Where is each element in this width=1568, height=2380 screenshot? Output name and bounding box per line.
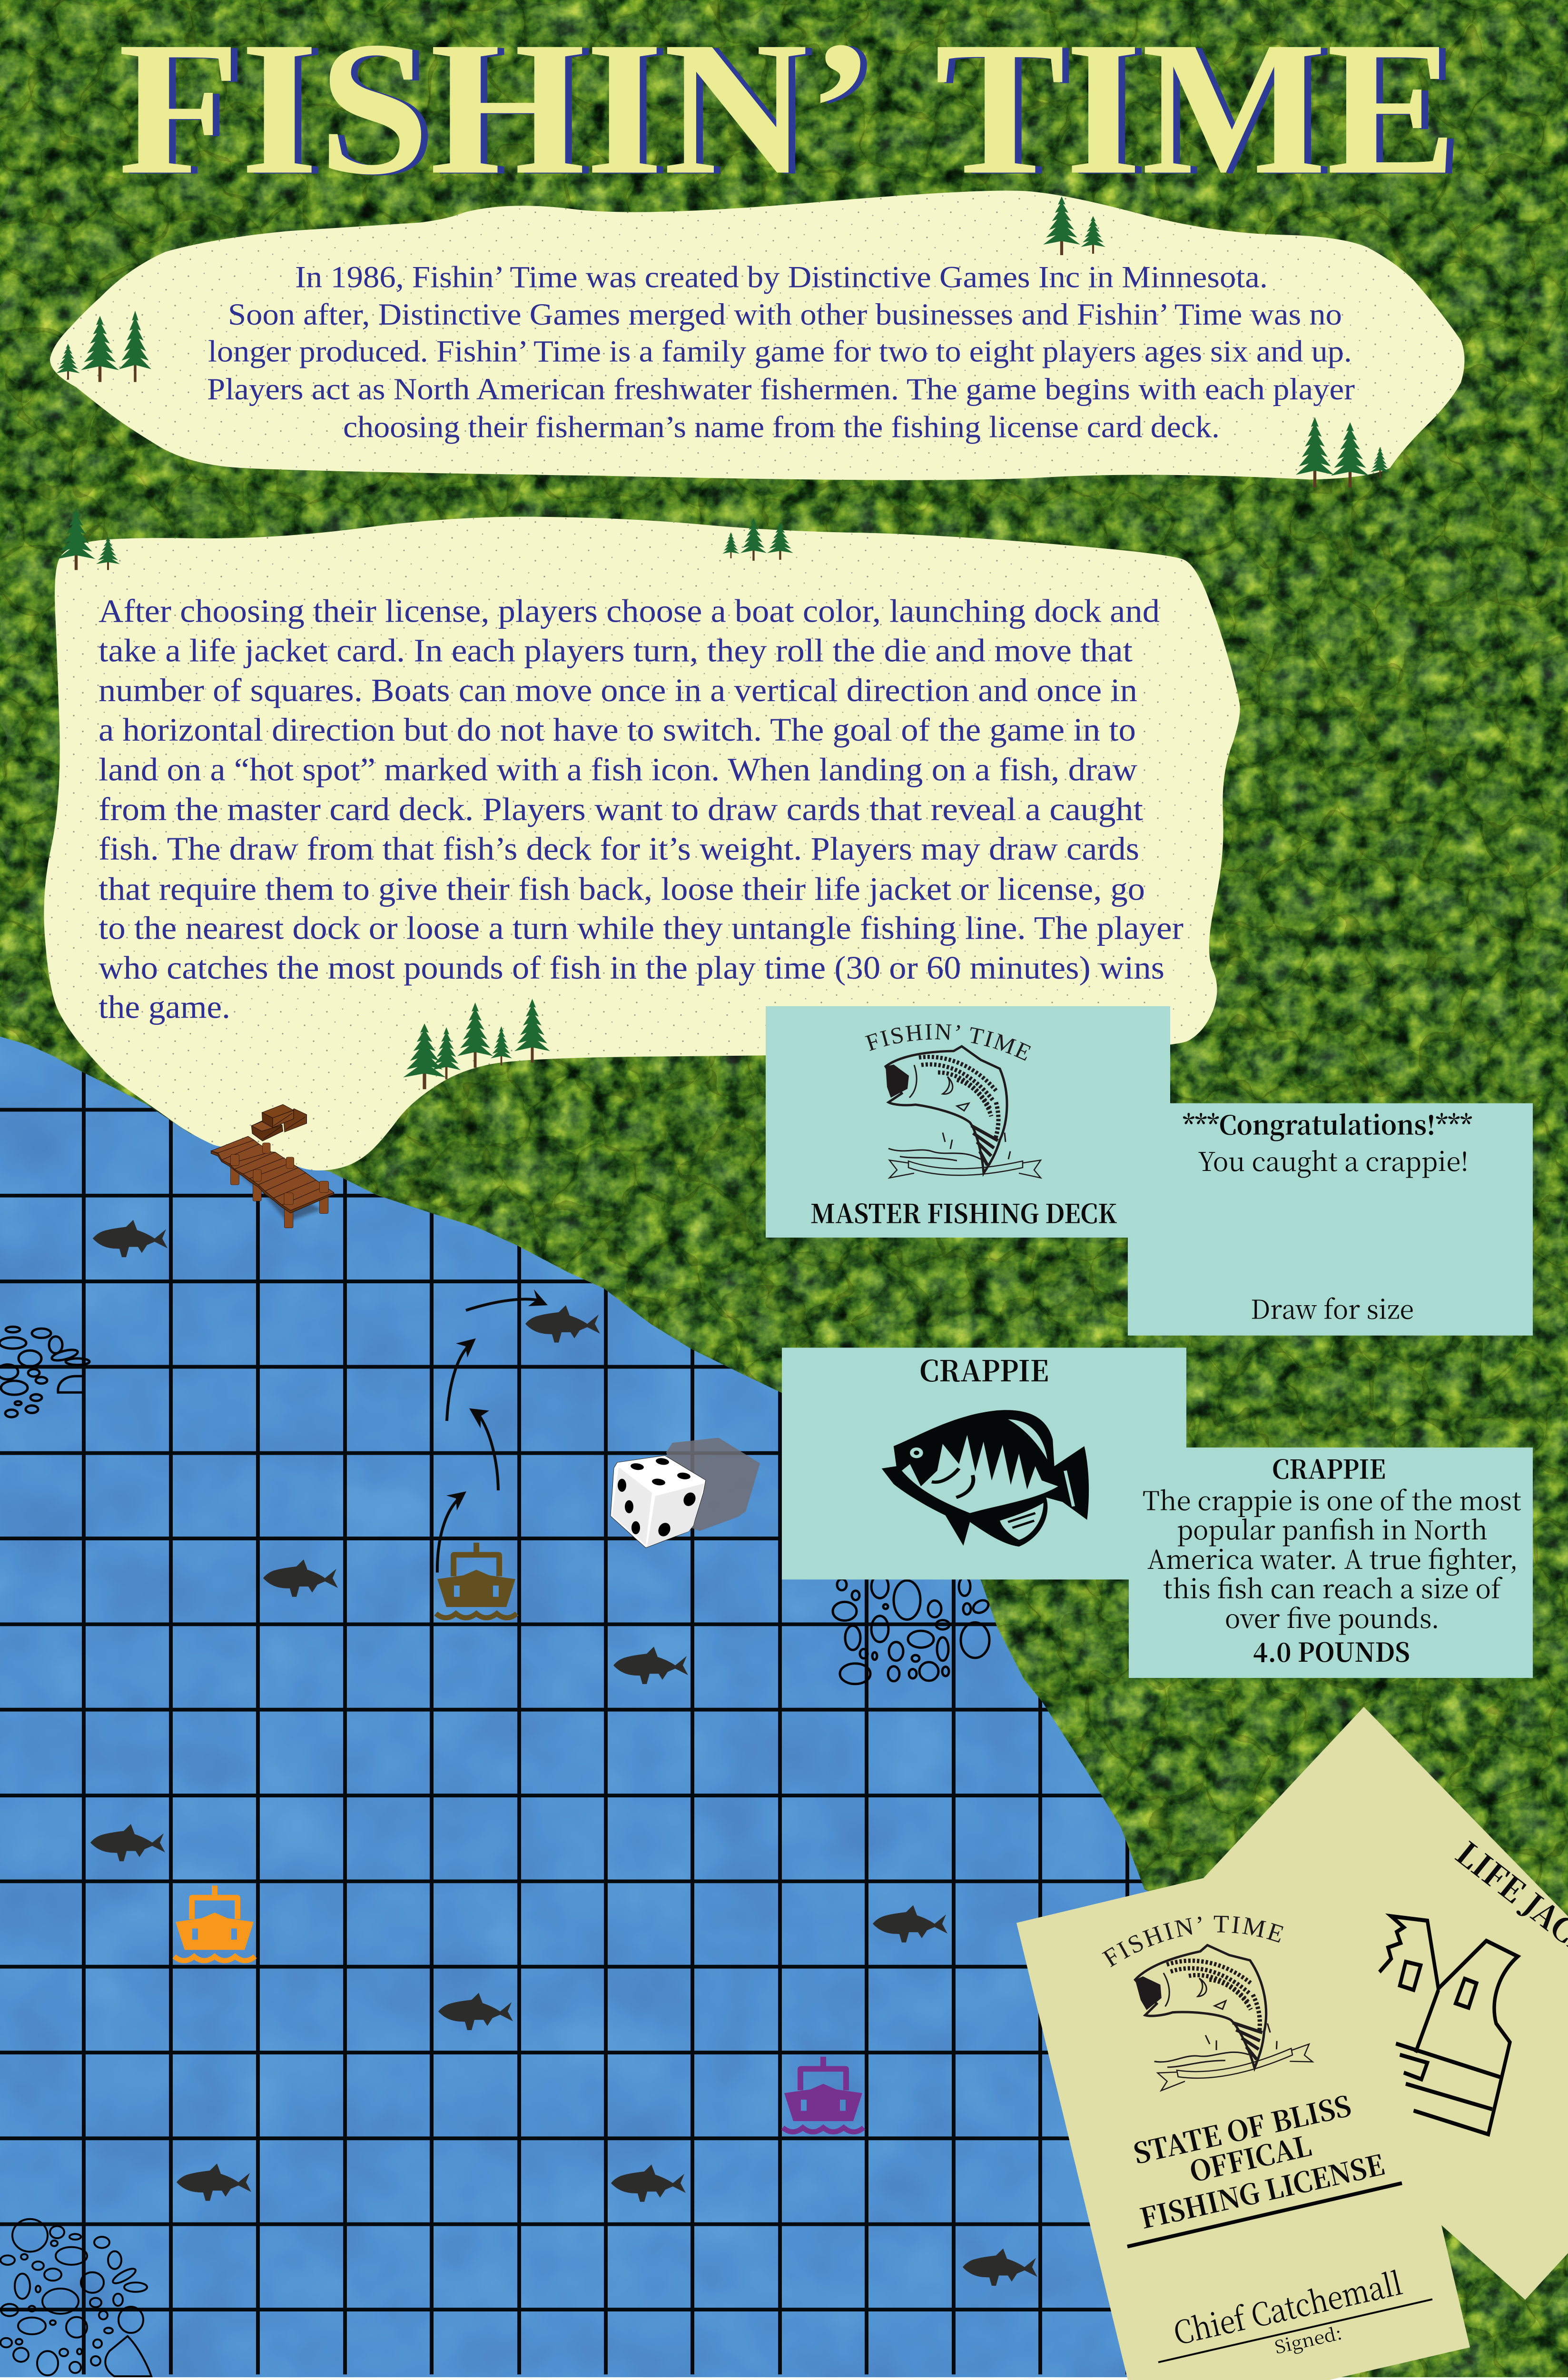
card: congratulations: You caught a crappie! xyxy=(1198,1140,1469,1179)
card: fishing license: Chief Catchemall xyxy=(1169,2259,1406,2354)
boat: orange xyxy=(174,1885,255,1961)
card: crappie description: CRAPPIE xyxy=(1272,1448,1386,1486)
logo: fishin' time arc text: FISHIN’ TIME xyxy=(862,1019,1036,1067)
card: crappie description: 4.0 POUNDS xyxy=(1253,1631,1410,1669)
rocks: left cluster xyxy=(0,1327,89,1417)
card: life jacket xyxy=(1203,1707,1568,2300)
rules text: take a life jacket card. In each players turn, they roll the die and move that xyxy=(99,632,1133,668)
card: congratulations: ***Congratulations!*** xyxy=(1183,1104,1472,1142)
sand shore: rules panel xyxy=(44,517,1240,1170)
logo: leaping bass xyxy=(1131,1930,1312,2092)
card: crappie description: over five pounds. xyxy=(1225,1598,1440,1636)
white strip at bottom edge xyxy=(0,2377,1568,2380)
card: crappie description: this fish can reach a size of xyxy=(1163,1568,1503,1606)
logo: leaping bass xyxy=(886,1046,1041,1178)
rocks: shore cluster xyxy=(833,1575,991,1684)
intro text: Players act as North American freshwater fishermen. The game begins with each player xyxy=(207,372,1355,407)
arrows: boat movement xyxy=(437,1289,548,1573)
dock legs xyxy=(231,1165,328,1228)
pine trees xyxy=(56,197,1390,1089)
rules text xyxy=(99,593,1183,1025)
intro text: In 1986, Fishin’ Time was created by Distinctive Games Inc in Minnesota. xyxy=(295,260,1268,295)
boat: brown xyxy=(436,1543,517,1618)
rules text: to the nearest dock or loose a turn while they untangle fishing line. The player xyxy=(99,910,1183,946)
logo: fishin' time arc text: FISHIN’ TIME xyxy=(1098,1910,1289,1973)
sand island: intro panel xyxy=(50,191,1465,480)
card: crappie picture xyxy=(782,1348,1186,1579)
card: crappie description: The crappie is one of the most xyxy=(1143,1480,1521,1517)
card: crappie picture: CRAPPIE xyxy=(919,1348,1049,1390)
license heading: OFFICAL xyxy=(1185,2124,1315,2190)
die with shadow xyxy=(611,1438,760,1548)
card: master fishing deck: MASTER FISHING DECK xyxy=(810,1193,1117,1230)
intro text xyxy=(207,260,1355,444)
title: FISHIN’ xyxy=(125,3,881,216)
rules text: fish. The draw from that fish’s deck for it’s weight. Players may draw cards xyxy=(99,831,1139,867)
icon: life jacket xyxy=(1380,1916,1518,2134)
boat: purple xyxy=(783,2057,864,2132)
icon: crappie fish xyxy=(882,1410,1089,1547)
card: fishing license: Signed: xyxy=(1272,2319,1344,2359)
card: fishing license xyxy=(1016,1878,1470,2380)
license heading: STATE OF BLISS xyxy=(1129,2084,1355,2172)
rules text: After choosing their license, players choose a boat color, launching dock and xyxy=(99,593,1160,629)
card: master fishing deck xyxy=(766,1006,1170,1238)
rules text: that require them to give their fish back, loose their life jacket or license, go xyxy=(99,871,1145,907)
dock deck xyxy=(211,1151,334,1213)
title: TIME xyxy=(941,3,1464,216)
rules text: from the master card deck. Players want to draw cards that reveal a caught xyxy=(99,791,1143,827)
card: crappie description xyxy=(1129,1448,1533,1678)
card: crappie description: America water. A true fighter, xyxy=(1147,1538,1518,1577)
intro text: longer produced. Fishin’ Time is a family game for two to eight players ages six and up. xyxy=(208,335,1352,368)
card: congratulations xyxy=(1128,1103,1533,1336)
rules text: who catches the most pounds of fish in the play time (30 or 60 minutes) wins xyxy=(99,950,1164,986)
rules text: the game. xyxy=(99,989,230,1025)
dock and crates xyxy=(211,1104,334,1228)
title xyxy=(118,2,1464,216)
rocks: bottom-left cluster xyxy=(0,2219,151,2376)
fish hot spots xyxy=(90,1220,1037,2286)
rules text: a horizontal direction but do not have to switch. The goal of the game in to xyxy=(99,712,1136,748)
rules text: number of squares. Boats can move once in a vertical direction and once in xyxy=(99,672,1137,708)
intro text: Soon after, Distinctive Games merged with other businesses and Fishin’ Time was no xyxy=(228,298,1342,332)
crates xyxy=(251,1104,306,1141)
rules text: land on a “hot spot” marked with a fish icon. When landing on a fish, draw xyxy=(99,751,1137,787)
title: FISHIN’ xyxy=(118,2,875,215)
dock posts xyxy=(231,1143,329,1205)
intro text: choosing their fisherman’s name from the fishing license card deck. xyxy=(343,410,1220,444)
license heading: FISHING LICENSE xyxy=(1136,2142,1388,2237)
card: crappie description: popular panfish in North xyxy=(1177,1509,1488,1547)
license heading xyxy=(1129,2084,1388,2237)
title: TIME xyxy=(935,2,1457,215)
card: congratulations: Draw for size xyxy=(1251,1289,1414,1326)
lake water with grid xyxy=(0,1026,1199,2377)
